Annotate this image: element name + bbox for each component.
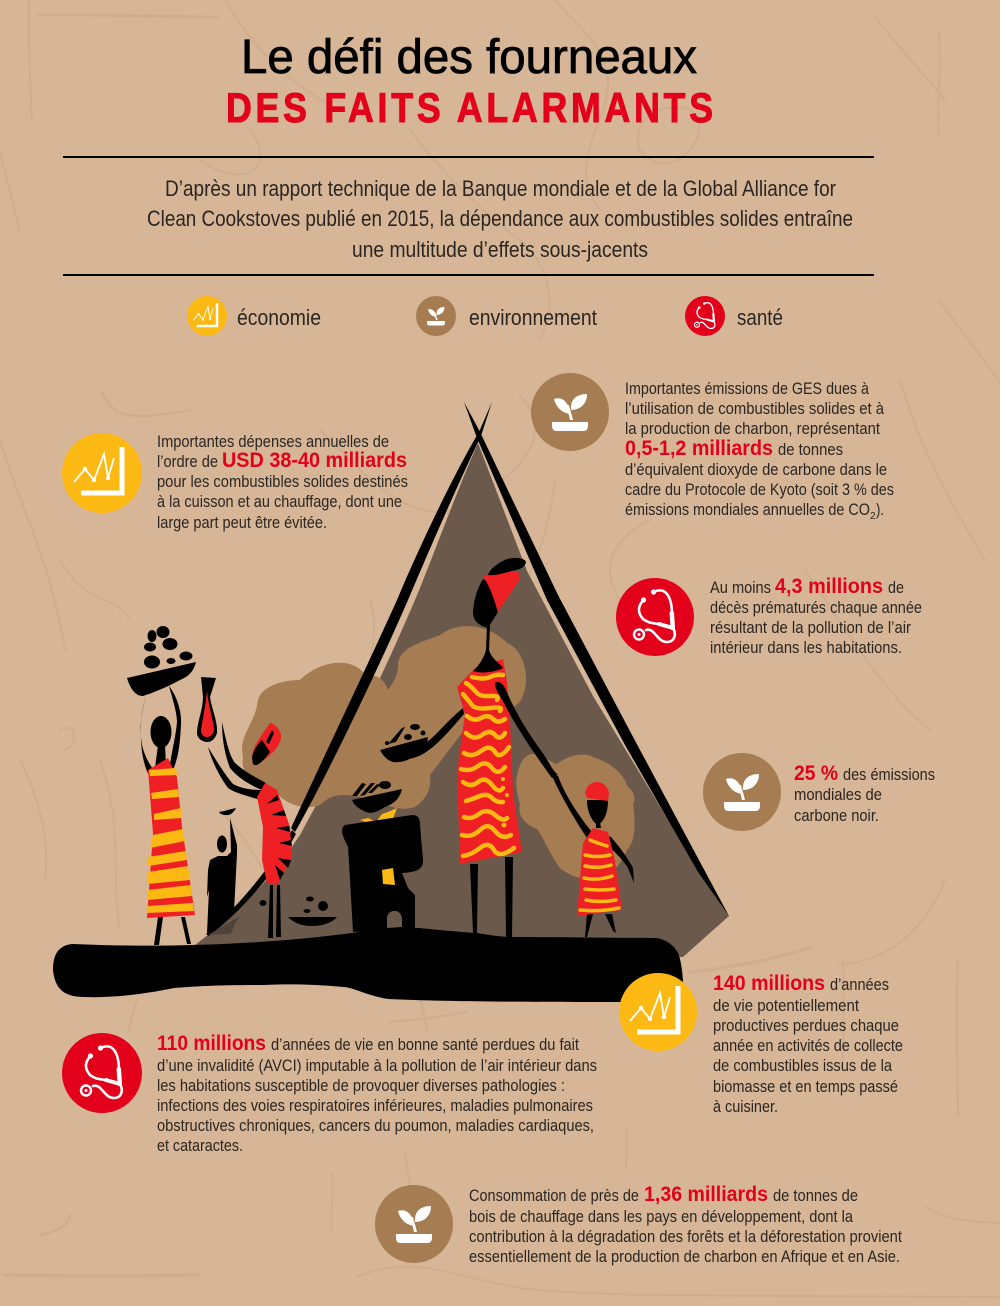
card: décès prématurés: Au moins (710, 578, 771, 597)
card: années de vie en bonne santé: et cataractes. (157, 1136, 243, 1155)
card: années de vie en bonne santé: d’une invalidité (AVCI) imputable à la pollution de l’air intérieur dans (157, 1056, 597, 1075)
card: années de vie productives: d’années (830, 975, 889, 994)
smoke clouds (242, 626, 635, 878)
card: bois de chauffage: Consommation de près de (469, 1186, 639, 1205)
title: DES FAITS ALARMANTS (226, 85, 713, 132)
arms (495, 682, 558, 778)
card: carbone noir: carbone noir. (794, 806, 879, 825)
card: émissions de GES: de tonnes (778, 440, 843, 459)
card: carbone noir: des émissions (843, 765, 935, 784)
floor bowl (260, 896, 337, 926)
card: dépenses annuelles: USD 38-40 milliards (222, 449, 407, 472)
tent fabric (195, 443, 729, 957)
card: dépenses annuelles (62, 432, 408, 532)
legend: environnement (416, 296, 597, 336)
legend: environnement: environnement (469, 305, 597, 330)
card: décès prématurés: décès prématurés chaque année (710, 598, 922, 617)
left woman with bowl (127, 626, 196, 945)
card: émissions de GES: cadre du Protocole de Kyoto (soit 3 % des (625, 480, 894, 499)
card: émissions de GES: émissions mondiales annuelles de CO (625, 500, 870, 519)
title: Le défi des fourneaux (241, 31, 697, 84)
card: émissions de GES (531, 373, 894, 522)
intro text: Clean Cookstoves publié en 2015, la dépendance aux combustibles solides entraîne (147, 206, 853, 231)
card: bois de chauffage: bois de chauffage dans les pays en développement, dont la (469, 1207, 853, 1226)
mother with child (380, 558, 634, 937)
legend (187, 296, 783, 336)
intro text: D’après un rapport technique de la Banque mondiale et de la Global Alliance for (165, 176, 836, 201)
ground (53, 928, 683, 1002)
card: bois de chauffage: contribution à la dégradation des forêts et la déforestation provient (469, 1227, 902, 1246)
card: émissions de GES: 2 (870, 511, 876, 522)
card: années de vie en bonne santé: obstructives chroniques, cancers du poumon, maladies cardiaques, (157, 1116, 594, 1135)
card: années de vie productives (619, 972, 903, 1116)
card: décès prématurés: 4,3 millions (775, 575, 883, 598)
card: décès prématurés: intérieur dans les habitations. (710, 638, 902, 657)
intro text (147, 176, 853, 262)
card: émissions de GES: ). (876, 500, 884, 519)
card: émissions de GES: d’équivalent dioxyde de carbone dans le (625, 460, 887, 479)
legend: économie: économie (237, 305, 321, 330)
card: années de vie productives: productives perdues chaque (713, 1016, 899, 1035)
card: émissions de GES: Importantes émissions de GES dues à (625, 379, 869, 398)
card: décès prématurés (616, 575, 922, 657)
intro text: une multitude d’effets sous-jacents (352, 237, 648, 262)
card: années de vie productives: à cuisiner. (713, 1097, 778, 1116)
card: années de vie productives: de vie potentiellement (713, 996, 859, 1015)
card: années de vie productives: de combustibles issus de la (713, 1056, 892, 1075)
card: bois de chauffage: 1,36 milliards (644, 1183, 768, 1206)
legend: économie (187, 296, 321, 336)
card: années de vie productives: biomasse et en temps passé (713, 1077, 898, 1096)
card: années de vie en bonne santé: infections des voies respiratoires inférieures, maladies pulmonaires (157, 1096, 593, 1115)
title (226, 31, 713, 132)
card: carbone noir: 25 % (794, 762, 838, 785)
card: années de vie productives: année en activités de collecte (713, 1036, 903, 1055)
card: émissions de GES: 0,5-1,2 milliards (625, 437, 773, 460)
card: émissions de GES: la production de charbon, représentant (625, 419, 880, 438)
card: carbone noir: mondiales de (794, 785, 882, 804)
illustration: tent scene (53, 402, 729, 1002)
card: émissions de GES: l’utilisation de combustibles solides et à (625, 399, 884, 418)
small child figure (207, 808, 237, 933)
child (585, 914, 616, 937)
legend: santé: santé (737, 305, 783, 330)
card: dépenses annuelles: large part peut être évitée. (157, 513, 327, 532)
card: bois de chauffage: de tonnes de (773, 1186, 858, 1205)
card: décès prématurés: de (888, 578, 904, 597)
card: bois de chauffage: essentiellement de la production de charbon en Afrique et en Asie. (469, 1247, 900, 1266)
card: bois de chauffage (375, 1183, 902, 1266)
card: dépenses annuelles: Importantes dépenses annuelles de (157, 432, 389, 451)
card: dépenses annuelles: pour les combustibles solides destinés (157, 472, 408, 491)
card: années de vie en bonne santé: d’années de vie en bonne santé perdues du fait (271, 1035, 579, 1054)
card: dépenses annuelles: à la cuisson et au chauffage, dont une (157, 492, 402, 511)
tent poles (291, 402, 492, 832)
card: années de vie en bonne santé: les habitations susceptible de provoquer diverses pathologies : (157, 1076, 565, 1095)
card: années de vie en bonne santé (62, 1032, 597, 1155)
card: dépenses annuelles: l’ordre de (157, 452, 218, 471)
head and hat (473, 579, 498, 628)
middle woman with vase (197, 677, 292, 938)
card: années de vie en bonne santé: 110 millions (157, 1032, 266, 1055)
card: carbone noir (703, 753, 935, 831)
card: années de vie productives: 140 millions (713, 972, 825, 995)
legend: santé (685, 296, 783, 336)
card: décès prématurés: résultant de la pollution de l’air (710, 618, 911, 637)
stove (342, 781, 423, 932)
